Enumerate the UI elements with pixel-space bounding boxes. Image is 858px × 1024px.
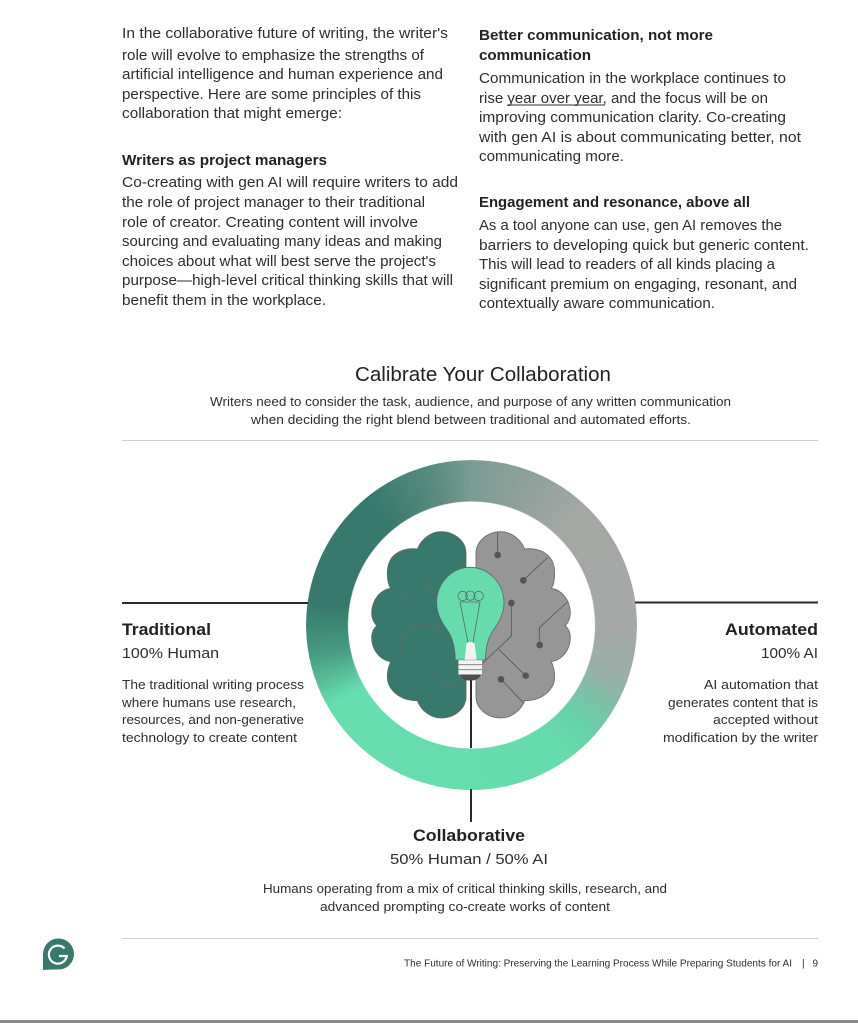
label: automated [663,620,819,745]
subheading: when deciding the right blend between traditional and automated efforts. [250,412,691,427]
heading: calibrate your collaboration: Calibrate Your Collaboration [355,364,611,386]
section: writers as project managers: benefit them in the workplace. [122,293,326,309]
logo: G mark [43,938,74,970]
section: better communication: with gen AI is about communicating better, not [478,130,801,146]
label: traditional: Traditional [122,620,211,639]
section: writers as project managers: Co-creating with gen AI will require writers to add [122,175,458,191]
intro paragraph [122,26,448,122]
label: automated: Automated [725,620,818,639]
section: writers as project managers: Writers as project managers [122,153,327,169]
label: traditional: 100% Human [122,645,219,662]
section: engagement and resonance: barriers to developing quick but generic content. [479,238,809,254]
section: writers as project managers: choices about what will best serve the project's [122,254,436,270]
section: engagement and resonance: As a tool anyone can use, gen AI removes the [479,218,782,234]
subheading: Writers need to consider the task, audience, and purpose of any written communication [210,394,731,409]
icon: right brain hemisphere with circuits [476,532,570,718]
section: writers as project managers: sourcing and evaluating many ideas and making [122,234,442,250]
connector lines [122,602,818,822]
icon: light bulb [437,567,504,681]
label: traditional: where humans use research, [121,695,296,710]
section: better communication: communicating more. [479,149,624,165]
subheading [210,394,731,427]
section: better communication: communication [479,48,591,64]
section: writers as project managers [122,153,458,309]
section: engagement and resonance [479,195,809,312]
section: better communication [478,28,801,165]
label: collaborative [263,826,667,914]
intro paragraph: perspective. Here are some principles of this [122,87,421,103]
footer text: | [802,958,805,970]
icon: left brain hemisphere [372,532,466,718]
section: writers as project managers: role of creator. Creating content will involve [122,215,418,231]
label: collaborative: 50% Human / 50% AI [390,851,548,868]
intro paragraph: role will evolve to emphasize the strengths of [122,48,425,64]
section: better communication: rise year over year, and the focus will be on [479,91,768,107]
label: traditional [121,620,305,745]
footer text: 9 [812,958,818,970]
label: collaborative: Humans operating from a mix of critical thinking skills, research, and [263,881,667,896]
section: better communication: improving communication clarity. Co-creating [479,110,786,126]
label: automated: accepted without [713,712,818,727]
intro paragraph: In the collaborative future of writing, the writer's [122,26,448,42]
section: engagement and resonance: significant premium on engaging, resonant, and [479,277,797,293]
section: better communication: Better communication, not more [479,28,713,44]
illustration: brain and light bulb [372,532,570,718]
intro paragraph: collaboration that might emerge: [122,106,342,122]
section: writers as project managers: the role of project manager to their traditional [122,195,425,211]
footer text: The Future of Writing: Preserving the Learning Process While Preparing Students for AI [404,958,792,970]
label: automated: 100% AI [761,645,818,662]
label: collaborative: advanced prompting co-create works of content [320,899,610,914]
label: traditional: technology to create content [122,730,297,745]
intro paragraph: artificial intelligence and human experience and [122,67,443,83]
ring: human to AI gradient [306,460,637,790]
section: engagement and resonance: contextually aware communication. [479,296,715,312]
label: automated: generates content that is [668,695,819,710]
section: writers as project managers: purpose—high-level critical thinking skills that will [122,273,453,289]
section: engagement and resonance: This will lead to readers of all kinds placing a [479,257,776,273]
label: collaborative: Collaborative [413,826,525,845]
label: automated: AI automation that [704,677,818,692]
label: automated: modification by the writer [663,730,819,745]
label: traditional: resources, and non-generative [122,712,304,727]
label: traditional: The traditional writing process [122,677,305,692]
section: engagement and resonance: Engagement and resonance, above all [479,195,750,211]
section: better communication: Communication in the workplace continues to [479,71,786,87]
